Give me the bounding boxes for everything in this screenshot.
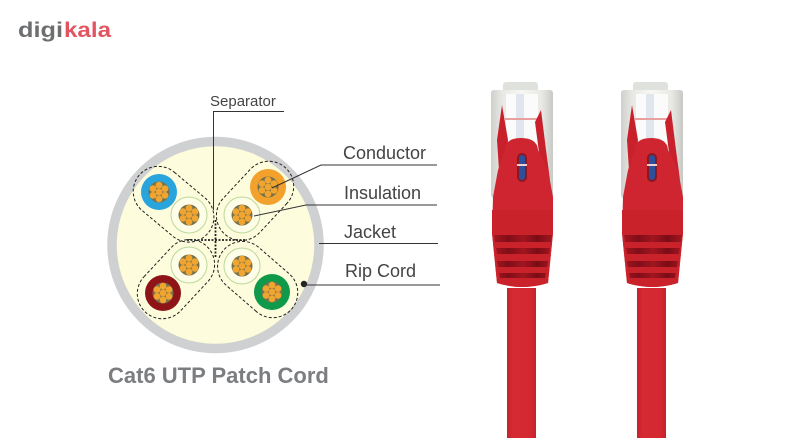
cable cross-section diagram [112,142,319,348]
separator dashed outlines [123,151,308,329]
logo: digikala: digi [18,19,63,42]
label: Conductor: Conductor [343,143,426,163]
label: Conductor [272,143,437,188]
label: Insulation [254,183,437,216]
red patch cord left [491,82,553,438]
label: Rip Cord [304,261,440,285]
wire: green [254,274,290,310]
jacket circle [112,142,319,348]
caption: Cat6 UTP Patch Cord [108,363,329,388]
wire: blue [141,174,177,210]
label: Jacket: Jacket [344,222,396,242]
label: Rip Cord: Rip Cord [345,261,416,281]
label: Jacket [319,222,438,244]
wire: white top right [224,197,260,233]
rip cord dot [301,281,307,287]
label: Separator: Separator [210,93,276,110]
wire: white bottom left [171,247,207,283]
logo: digikala: kala [64,19,111,42]
wire: orange [250,169,286,205]
wire: white top left [171,197,207,233]
wire: white bottom right [224,248,260,284]
red patch cord right [621,82,683,438]
wire: red [145,275,181,311]
label: Insulation: Insulation [344,183,421,203]
logo: digikala [18,19,111,42]
label: Separator [210,93,284,210]
